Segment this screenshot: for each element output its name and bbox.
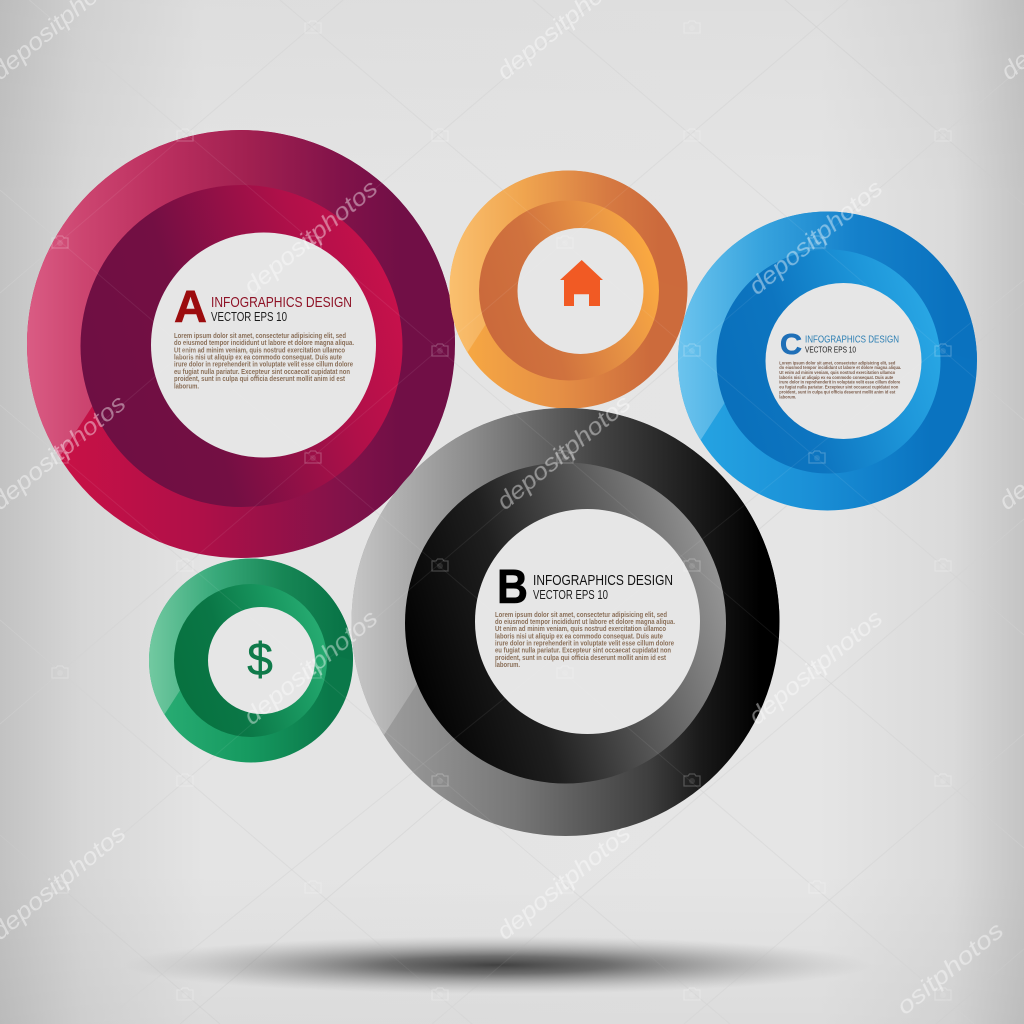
watermark: depositphotos text: depositphotos — [492, 390, 636, 516]
watermark: depositphotos text: depositphotos — [239, 605, 383, 731]
watermark: depositphotos text: depositphotos — [239, 175, 383, 301]
ring B subheading: VECTOR EPS 10 — [533, 588, 608, 602]
ring A middle band — [80, 185, 402, 507]
orange outer upper highlight band — [450, 171, 688, 352]
ring: orange home — [450, 170, 688, 408]
ring C body text: Lorem ipsum dolor sit amet, consectetur adipisicing elit, sed — [779, 360, 895, 365]
ring C letter: C — [780, 329, 802, 361]
ring B body text: do eiusmod tempor incididunt ut labore et dolore magna aliqua. — [495, 619, 675, 626]
ring A outer lower band — [27, 130, 455, 558]
ring A outer upper highlight band — [27, 130, 455, 457]
orange centre disc — [518, 228, 644, 354]
ring: green dollar — [149, 558, 353, 762]
ring B: black text ring — [352, 408, 780, 836]
ring A body text: irure dolor in reprehenderit in voluptate velit esse cillum dolore — [174, 362, 353, 369]
ring C body text: laborum. — [779, 394, 796, 399]
ring B body text: Lorem ipsum dolor sit amet, consectetur adipisicing elit, sed — [495, 612, 667, 619]
floor shadow — [122, 936, 872, 994]
ring A body text: do eiusmod tempor incididunt ut labore et dolore magna aliqua. — [174, 340, 354, 347]
green middle band — [174, 584, 327, 737]
ring A body text — [174, 333, 354, 390]
ring B body text: laboris nisi ut aliquip ex ea commodo consequat. Duis aute — [495, 633, 663, 640]
ring B body text: proident, sunt in culpa qui officia deserunt mollit anim id est — [495, 655, 667, 662]
ring A subheading: VECTOR EPS 10 — [211, 310, 287, 324]
ring C heading: INFOGRAPHICS DESIGN — [805, 335, 899, 346]
ring A: crimson text ring — [27, 130, 455, 558]
ring B body text: Ut enim ad minim veniam, quis nostrud exercitation ullamco — [495, 626, 666, 633]
ring B body text: irure dolor in reprehenderit in voluptate velit esse cillum dolore — [495, 640, 674, 648]
ring B heading: INFOGRAPHICS DESIGN — [533, 572, 673, 589]
ring A letter: A — [174, 281, 207, 332]
ring B centre disc — [475, 509, 700, 734]
ring B letter: B — [497, 561, 528, 614]
ring A body text: eu fugiat nulla pariatur. Excepteur sint occaecat cupidatat non — [174, 369, 350, 376]
watermark: depositphotos text: depositphotos — [492, 820, 636, 946]
ring C subheading: VECTOR EPS 10 — [805, 344, 856, 354]
ring A centre disc — [151, 232, 376, 458]
ring C body text — [779, 360, 901, 399]
icon: house — [560, 260, 603, 306]
ring C body text: Ut enim ad minim veniam, quis nostrud exercitation ullamco — [779, 370, 895, 375]
ring B body text: laborum. — [495, 662, 520, 669]
ring C body text: do eiusmod tempor incididunt ut labore et dolore magna aliqua. — [779, 365, 901, 370]
watermark: depositphotos text: depositphotos — [744, 175, 888, 301]
ring A heading: INFOGRAPHICS DESIGN — [211, 294, 352, 311]
watermark: depositphotos text: ositphotos — [892, 917, 1009, 1021]
orange outer lower band — [450, 170, 688, 408]
ring A body text: Ut enim ad minim veniam, quis nostrud exercitation ullamco — [174, 347, 345, 354]
green outer lower band — [149, 558, 353, 762]
green outer upper highlight band — [149, 559, 353, 714]
ring A body text: laborum. — [174, 383, 199, 390]
ring A body text: laboris nisi ut aliquip ex ea commodo consequat. Duis aute — [174, 355, 342, 362]
ring B body text: eu fugiat nulla pariatur. Excepteur sint occaecat cupidatat non — [495, 648, 671, 655]
ring C body text: irure dolor in reprehenderit in voluptate velit esse cillum dolore — [779, 380, 901, 385]
ring B outer upper highlight band — [352, 408, 780, 735]
ring C body text: laboris nisi ut aliquip ex ea commodo consequat. Duis aute — [779, 375, 894, 380]
green centre disc — [208, 607, 315, 714]
ring B outer lower band — [352, 408, 780, 836]
ring C outer upper highlight band — [678, 212, 977, 440]
watermark: depositphotos text: depositphotos — [744, 605, 888, 731]
ring B body text — [495, 612, 675, 669]
ring C: blue text ring — [678, 212, 977, 510]
ring C body text: proident, sunt in culpa qui officia deserunt mollit anim id est — [779, 389, 896, 394]
ring B middle band — [405, 462, 726, 784]
ring C outer lower band — [678, 212, 977, 510]
icon: dollar sign: $ — [247, 633, 273, 685]
ring A body text: proident, sunt in culpa qui officia deserunt mollit anim id est — [174, 376, 346, 383]
orange middle band — [479, 200, 659, 380]
ring C centre disc — [766, 283, 922, 439]
ring A body text: Lorem ipsum dolor sit amet, consectetur adipisicing elit, sed — [174, 333, 346, 340]
ring C middle band — [716, 250, 940, 474]
ring C body text: eu fugiat nulla pariatur. Excepteur sint occaecat cupidatat non — [779, 385, 898, 390]
